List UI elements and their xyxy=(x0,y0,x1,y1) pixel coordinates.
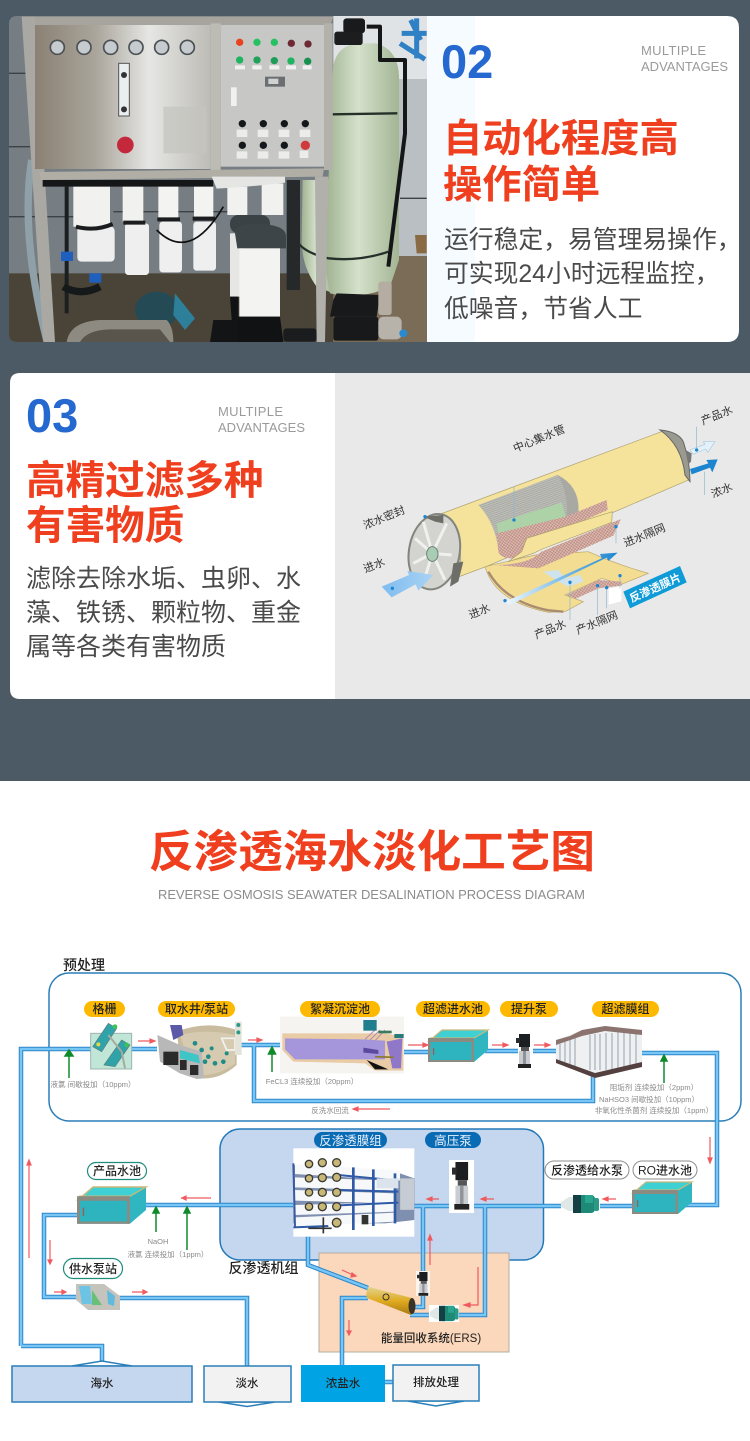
heading: filtration: 有害物质 xyxy=(26,504,184,548)
dosing notes: 非氧化性杀菌剂 连续投加（1ppm） xyxy=(595,1105,713,1115)
yellow stage labels: 超滤膜组 xyxy=(601,1001,650,1016)
icon: supply pump station xyxy=(76,1284,120,1310)
panel: RO unit: 反渗透机组 xyxy=(228,1260,298,1276)
icon: UF membrane rack xyxy=(556,1026,642,1078)
icon: product water tank xyxy=(77,1187,146,1224)
box: fresh water: 淡水 xyxy=(236,1376,259,1390)
label: multiple advantages xyxy=(218,404,305,435)
label: membrane sheet: 反渗透膜片 xyxy=(627,570,683,605)
box: discharge treatment xyxy=(393,1365,479,1406)
icon: energy recovery vessel xyxy=(366,1287,416,1315)
text block: filtration description: 滤除去除水垢、虫卵、水 xyxy=(26,565,301,593)
labels: membrane parts xyxy=(361,402,735,642)
labels: membrane parts: 中心集水管 xyxy=(511,422,567,455)
card text side xyxy=(10,373,335,699)
panel: pre-treatment: 预处理 xyxy=(63,957,105,973)
box: brine xyxy=(301,1365,385,1402)
labels: membrane parts: 进水隔网 xyxy=(622,521,667,550)
text block: automation description: 低噪音，节省人工 xyxy=(444,295,642,323)
dosing notes: FeCL3 连续投加（20ppm） xyxy=(266,1076,358,1086)
icon: lift pump xyxy=(516,1034,531,1068)
outlined labels: 反渗透给水泵 xyxy=(551,1162,623,1178)
yellow stage labels: 絮凝沉淀池 xyxy=(310,1001,370,1016)
box: fresh water xyxy=(204,1366,291,1406)
box: seawater xyxy=(12,1361,192,1402)
heading: filtration: 高精过滤多种 xyxy=(26,459,263,503)
blue labels: 反渗透膜组 xyxy=(319,1133,382,1148)
heading: filtration xyxy=(26,459,263,548)
title: 反渗透海水淡化工艺图 xyxy=(149,828,595,877)
icon: RO feed tank xyxy=(632,1182,692,1214)
text block: automation description: 运行稳定，易管理易操作， xyxy=(444,226,742,254)
icon: booster pump xyxy=(416,1271,430,1296)
dosing notes: 液氯 连续投加（1ppm） xyxy=(128,1249,208,1259)
outlined labels: RO进水池 xyxy=(638,1162,692,1178)
dark slate background xyxy=(0,0,750,781)
dosing notes: NaHSO3 间歇投加（10ppm） xyxy=(599,1094,699,1104)
icon: high pressure pump xyxy=(449,1160,474,1213)
label: membrane sheet xyxy=(623,566,687,608)
labels: membrane parts: 浓水 xyxy=(709,480,734,501)
dosing notes: 阻垢剂 连续投加（2ppm） xyxy=(610,1082,698,1092)
text block: filtration description: 属等各类有害物质 xyxy=(26,633,226,661)
outlined labels: 供水泵站 xyxy=(69,1261,117,1276)
heading: automation: 自动化程度高 xyxy=(443,117,679,161)
labels: membrane parts: 产品水 xyxy=(699,402,735,428)
outlined labels: 产品水池 xyxy=(93,1163,141,1178)
dosing notes: 反洗水回流 xyxy=(311,1105,349,1115)
panel: RO unit xyxy=(220,1129,544,1276)
label: multiple advantages xyxy=(641,43,728,74)
diagram: reverse osmosis membrane element xyxy=(361,402,735,642)
section background xyxy=(0,781,750,1441)
panel: pre-treatment xyxy=(49,957,741,1121)
labels: membrane parts: 进水 xyxy=(467,601,492,622)
label: multiple advantages: MULTIPLE xyxy=(218,404,283,419)
photo: reverse osmosis water machine xyxy=(0,13,433,347)
icon: ERS circulation pump xyxy=(429,1305,459,1322)
yellow stage labels: 提升泵 xyxy=(511,1001,547,1016)
blue labels xyxy=(314,1132,481,1148)
labels: membrane parts: 进水 xyxy=(362,555,387,576)
process diagram xyxy=(12,957,741,1406)
icon: RO feed pump xyxy=(561,1195,599,1213)
yellow stage labels: 取水井/泵站 xyxy=(165,1001,228,1016)
dosing notes: 液氯 间歇投加（10ppm） xyxy=(50,1079,136,1089)
icon: RO membrane stack xyxy=(293,1148,414,1237)
text block: automation description xyxy=(444,226,742,323)
outlined labels xyxy=(64,1161,697,1278)
text block: filtration description xyxy=(26,565,301,661)
icon: UF feed tank xyxy=(428,1030,488,1062)
heading: automation: 操作简单 xyxy=(443,163,600,207)
labels: membrane parts: 产品水 xyxy=(532,616,568,642)
panel: advantage 03 filtration xyxy=(10,373,750,699)
panel: energy recovery system xyxy=(319,1253,509,1352)
icon: flocculation sedimentation tank xyxy=(280,1017,404,1073)
labels: membrane parts: 产水隔网 xyxy=(574,608,620,637)
icon: intake well pump station xyxy=(157,1022,242,1079)
yellow stage labels: 格栅 xyxy=(92,1001,117,1016)
yellow stage labels: 超滤进水池 xyxy=(423,1001,483,1016)
green dosing arrows xyxy=(65,1047,667,1250)
label: multiple advantages: ADVANTAGES xyxy=(218,420,305,435)
subtitle: REVERSE OSMOSIS SEAWATER DESALINATION PROCESS DIAGRAM xyxy=(158,887,585,902)
dosing notes: NaOH xyxy=(148,1237,168,1246)
dosing notes xyxy=(50,1076,713,1259)
yellow stage labels xyxy=(84,1001,659,1017)
icon: bar screen xyxy=(91,1023,132,1069)
membrane diagram panel xyxy=(335,373,750,699)
label: multiple advantages: MULTIPLE xyxy=(641,43,706,58)
panel: energy recovery system: 能量回收系统(ERS) xyxy=(381,1331,481,1345)
labels: membrane parts: 浓水密封 xyxy=(361,503,407,532)
card background xyxy=(427,16,739,342)
pipes xyxy=(21,1045,717,1382)
box: seawater: 海水 xyxy=(90,1376,114,1390)
red flow arrows xyxy=(27,1038,712,1335)
box: discharge treatment: 排放处理 xyxy=(413,1375,459,1389)
number 02: 02 xyxy=(441,35,493,88)
text block: automation description: 可实现24小时远程监控， xyxy=(444,260,720,288)
heading: automation xyxy=(443,117,679,207)
label: multiple advantages: ADVANTAGES xyxy=(641,59,728,74)
text block: filtration description: 藻、铁锈、颗粒物、重金 xyxy=(26,599,301,627)
box: brine: 浓盐水 xyxy=(326,1376,361,1390)
number 03: 03 xyxy=(26,389,78,442)
blue labels: 高压泵 xyxy=(434,1133,472,1148)
panel: advantage 02 automation xyxy=(0,13,742,347)
tinted strip xyxy=(427,16,475,342)
